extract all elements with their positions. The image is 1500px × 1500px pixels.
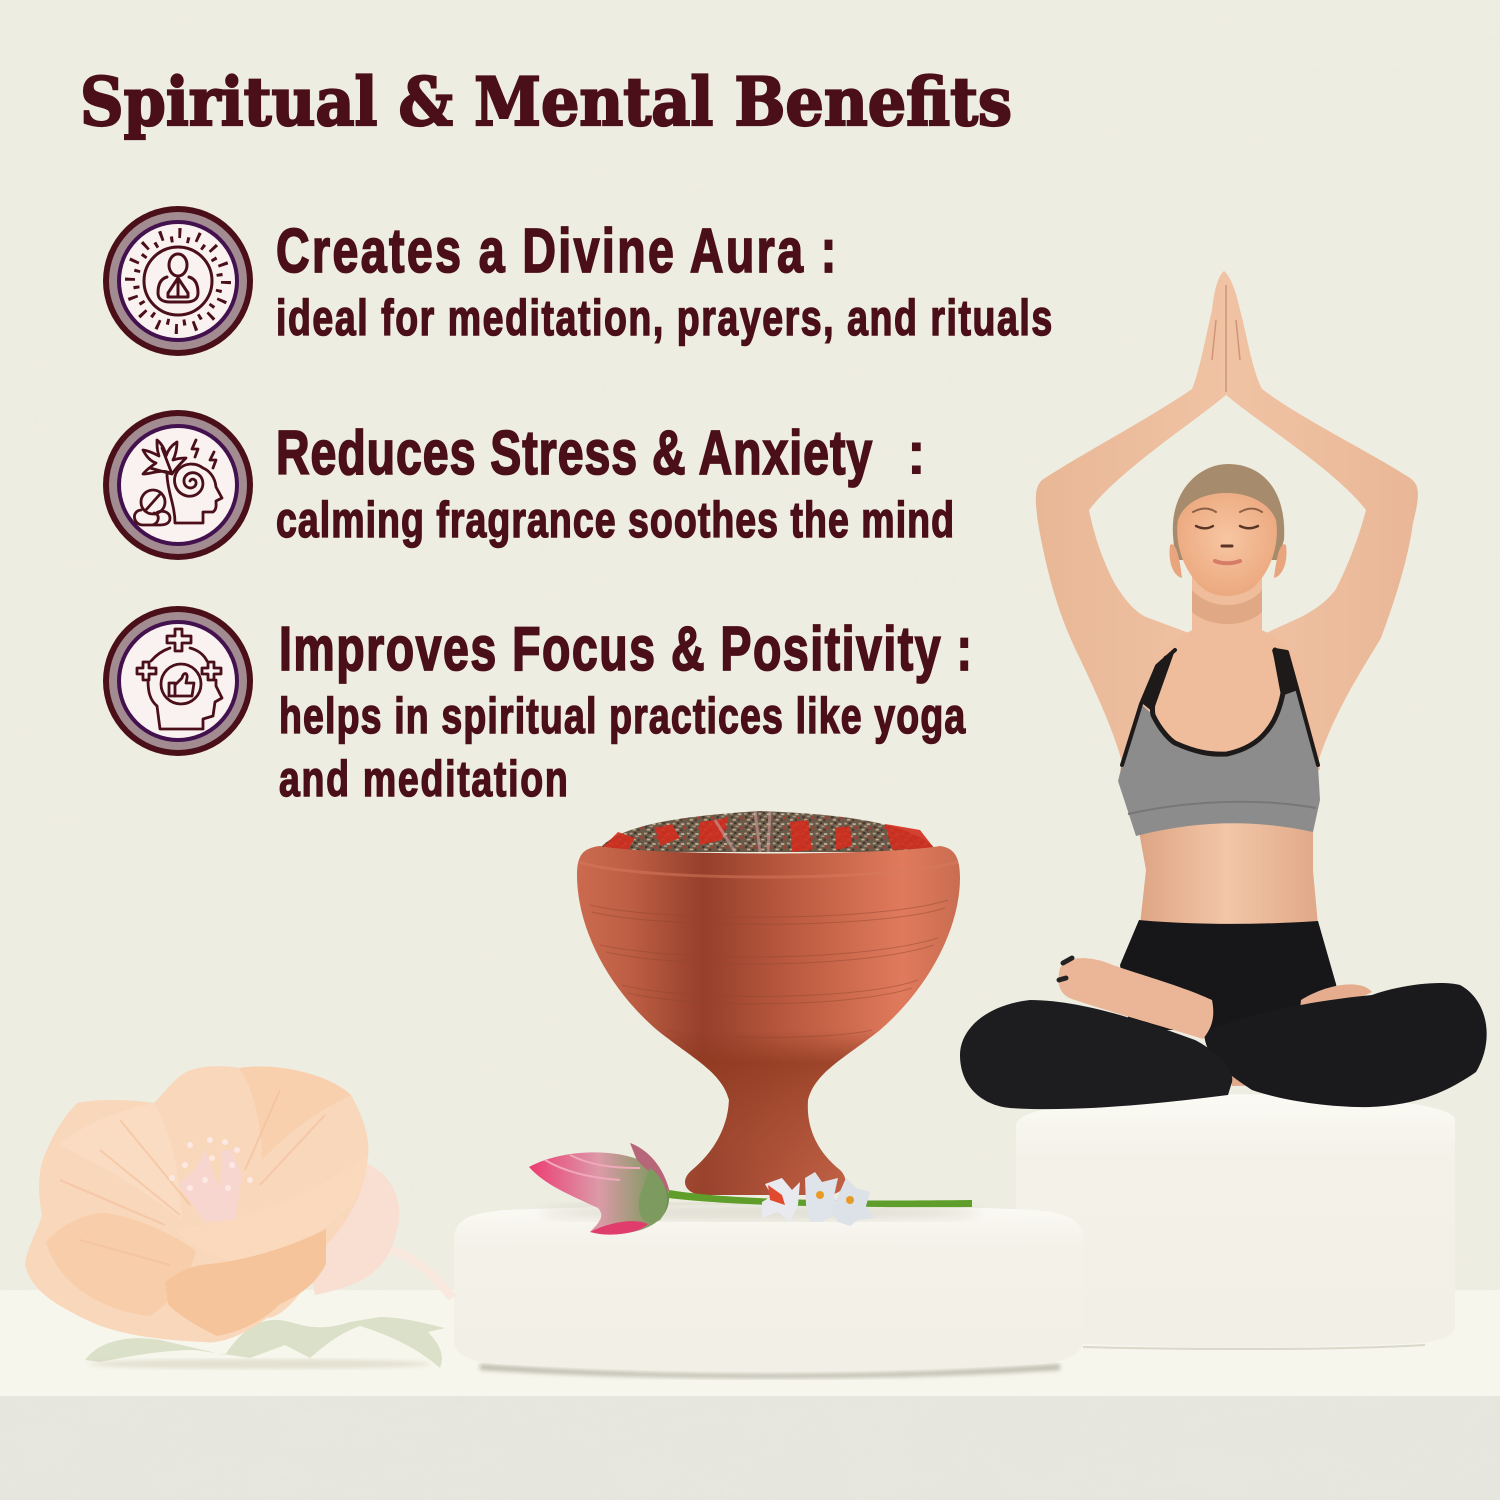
sports bra	[1118, 688, 1320, 836]
text: and meditation: and meditation	[279, 752, 568, 807]
skin between legs	[1225, 1060, 1280, 1086]
clay incense bowl	[577, 811, 960, 1195]
icon: head with thumbs up and plus signs	[103, 606, 253, 756]
torso	[1136, 815, 1318, 925]
rim highlight	[579, 862, 958, 877]
icon: meditating person in sun rays	[103, 206, 253, 356]
flower leaves	[85, 1317, 445, 1368]
text: helps in spiritual practices: helps in spiritual practices like yoga	[279, 689, 966, 744]
peach flower	[25, 1066, 452, 1368]
colon: :	[906, 419, 927, 488]
flower silhouette	[25, 1066, 368, 1342]
stamens	[169, 1137, 253, 1222]
stem shading	[657, 1030, 880, 1195]
text: ideal for meditation: ideal for meditation, prayers, and rituals	[276, 291, 1052, 346]
petal folds	[60, 1103, 182, 1220]
benefit 2	[103, 410, 954, 560]
left leg	[960, 1000, 1232, 1109]
benefit 1	[103, 206, 1052, 356]
lotus bud	[529, 1143, 972, 1235]
hand finger lines	[1212, 285, 1240, 392]
heading: reduces stress: Reduces Stress & Anxiety	[276, 417, 873, 488]
icon: head with spiral, leaf and pills	[103, 410, 253, 560]
bra straps	[1143, 650, 1298, 712]
title: Spiritual & Mental Benefits	[80, 63, 1012, 141]
back pink petal	[300, 1160, 399, 1295]
chest and neck	[1120, 575, 1320, 770]
benefit 3	[103, 606, 972, 807]
right leg	[1204, 983, 1487, 1107]
bra band	[1128, 802, 1316, 814]
hair	[1173, 464, 1284, 560]
left pedestal	[454, 1204, 1083, 1378]
yoga pants waist	[1120, 920, 1345, 1030]
white shelf	[0, 1290, 1500, 1500]
face	[1177, 493, 1277, 596]
arms and shoulders	[1036, 271, 1418, 762]
throwing lines	[590, 900, 948, 1038]
incense mixture	[597, 811, 938, 852]
bra black trim	[1122, 650, 1318, 765]
facial features	[1193, 509, 1262, 563]
heading: creates a divine aura: Creates a Divine Aura :	[276, 215, 836, 286]
right pedestal	[1016, 1094, 1455, 1349]
bowl body	[577, 846, 960, 1195]
heading: improves focus: Improves Focus & Positivity :	[279, 613, 972, 684]
text: calming fragrance: calming fragrance soothes the mind	[276, 493, 954, 548]
neck shadow	[1192, 590, 1262, 624]
small white flowers	[762, 1172, 874, 1226]
woman in yoga pose	[960, 271, 1487, 1109]
nails	[1059, 958, 1072, 980]
crossed foot and hand	[1059, 958, 1213, 1039]
flower stem	[385, 1250, 452, 1298]
ears	[1170, 544, 1286, 578]
foot behind	[1300, 984, 1372, 1010]
